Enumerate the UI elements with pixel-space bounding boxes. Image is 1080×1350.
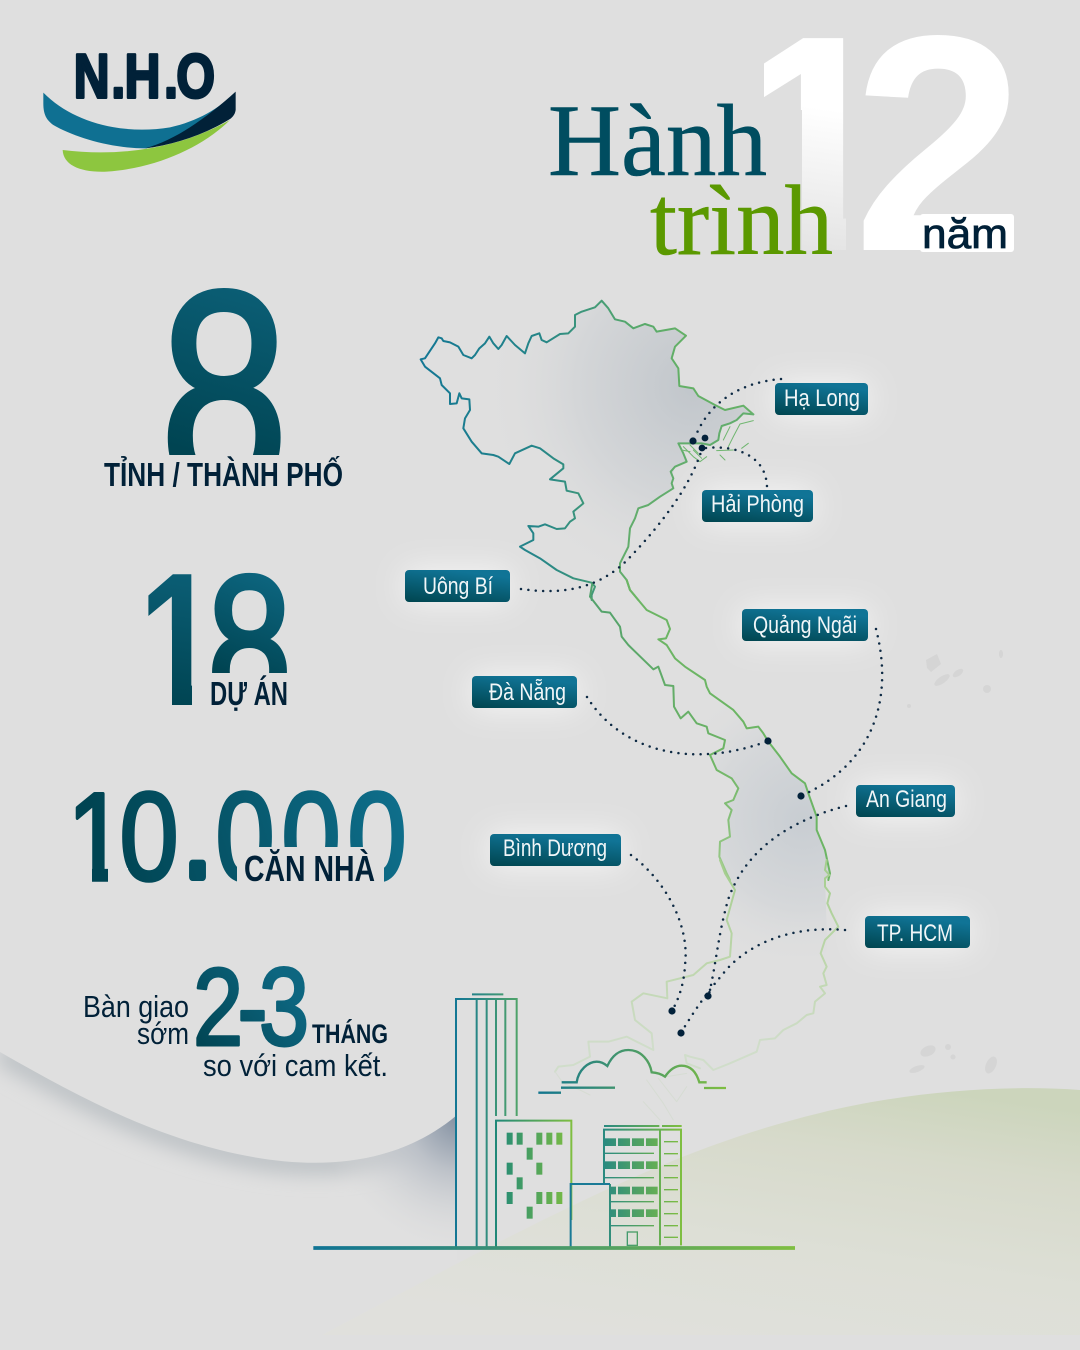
- stat: 10.000 homes: [76, 790, 404, 883]
- number 8: 8: [208, 537, 292, 749]
- label: Ha Long: Hạ Long: [784, 385, 860, 412]
- building illustration: [313, 994, 795, 1248]
- label nam: năm: [922, 210, 1008, 257]
- border north-west: [421, 301, 753, 600]
- border south: [555, 860, 735, 1072]
- border central: [590, 583, 738, 880]
- big number 12: [764, 35, 1014, 252]
- logo blue swoosh: [43, 92, 236, 148]
- logo: [43, 41, 236, 172]
- map central: [590, 580, 830, 957]
- dotted connectors: [521, 379, 882, 1031]
- label: An Giang: An Giang: [866, 786, 947, 813]
- cloud illustration: [538, 1050, 726, 1093]
- label: Uong Bi: Uông Bí: [423, 573, 493, 600]
- stat: 2-3 months early: [83, 947, 388, 1083]
- knockout behind label: [237, 847, 384, 887]
- small building: [571, 1184, 610, 1247]
- label provinces: TỈNH / THÀNH PHỐ: [104, 455, 343, 493]
- title: [548, 84, 833, 276]
- label: An Giang: [856, 785, 955, 817]
- text line 3: so với cam kết.: [203, 1048, 388, 1083]
- map of Vietnam: [421, 301, 838, 1120]
- logo wordmark: N.H.O: [74, 41, 215, 111]
- stat: 18 projects: [148, 572, 287, 711]
- number 1: 1: [139, 534, 218, 746]
- label months: THÁNG: [312, 1018, 388, 1049]
- text line 1: Bàn giao: [83, 989, 189, 1024]
- label homes: CĂN NHÀ: [244, 848, 375, 889]
- label: Da Nang: Đà Nẵng: [489, 678, 566, 706]
- label: Uong Bi: [405, 570, 510, 602]
- nam badge: [920, 214, 1014, 252]
- stat: 8 provinces: [104, 288, 342, 487]
- number: 000: [215, 767, 407, 907]
- coast south: [685, 860, 838, 1070]
- right building: [604, 1126, 682, 1247]
- label: Binh Duong: Bình Dương: [503, 835, 607, 862]
- text line 2: sớm: [137, 1016, 189, 1051]
- logo green swoosh: [63, 120, 230, 172]
- map south: [555, 860, 838, 1120]
- label projects: DỰ ÁN: [210, 675, 288, 712]
- label glows: [405, 383, 970, 948]
- number 8: 8: [160, 231, 289, 555]
- title line 2: trình: [650, 165, 833, 276]
- distant islands: [907, 650, 1003, 1075]
- title line 1: Hành: [548, 84, 767, 198]
- number 2-3: 2-3: [193, 947, 309, 1069]
- location dots: [668, 435, 805, 1037]
- number: [76, 790, 404, 883]
- number: .: [183, 764, 212, 904]
- label: Da Nang: [472, 676, 577, 708]
- label: Quang Ngai: Quảng Ngãi: [753, 612, 857, 639]
- tower: [456, 994, 517, 1247]
- background hill: [322, 1088, 1080, 1335]
- number: 10: [67, 767, 179, 907]
- background swoosh shadow: [0, 1052, 455, 1212]
- label: Hai Phong: Hải Phòng: [711, 491, 804, 518]
- coast central: [627, 580, 830, 880]
- map north: [421, 301, 753, 600]
- label: Binh Duong: [490, 834, 621, 866]
- middle building: [496, 1121, 571, 1247]
- islands near Ha Long: [682, 421, 753, 462]
- delta lines: [555, 1072, 687, 1120]
- ground line: [313, 1242, 795, 1253]
- logo navy swoosh: [145, 92, 236, 148]
- coast north: [620, 413, 753, 600]
- label: TP HCM: TP. HCM: [877, 920, 953, 947]
